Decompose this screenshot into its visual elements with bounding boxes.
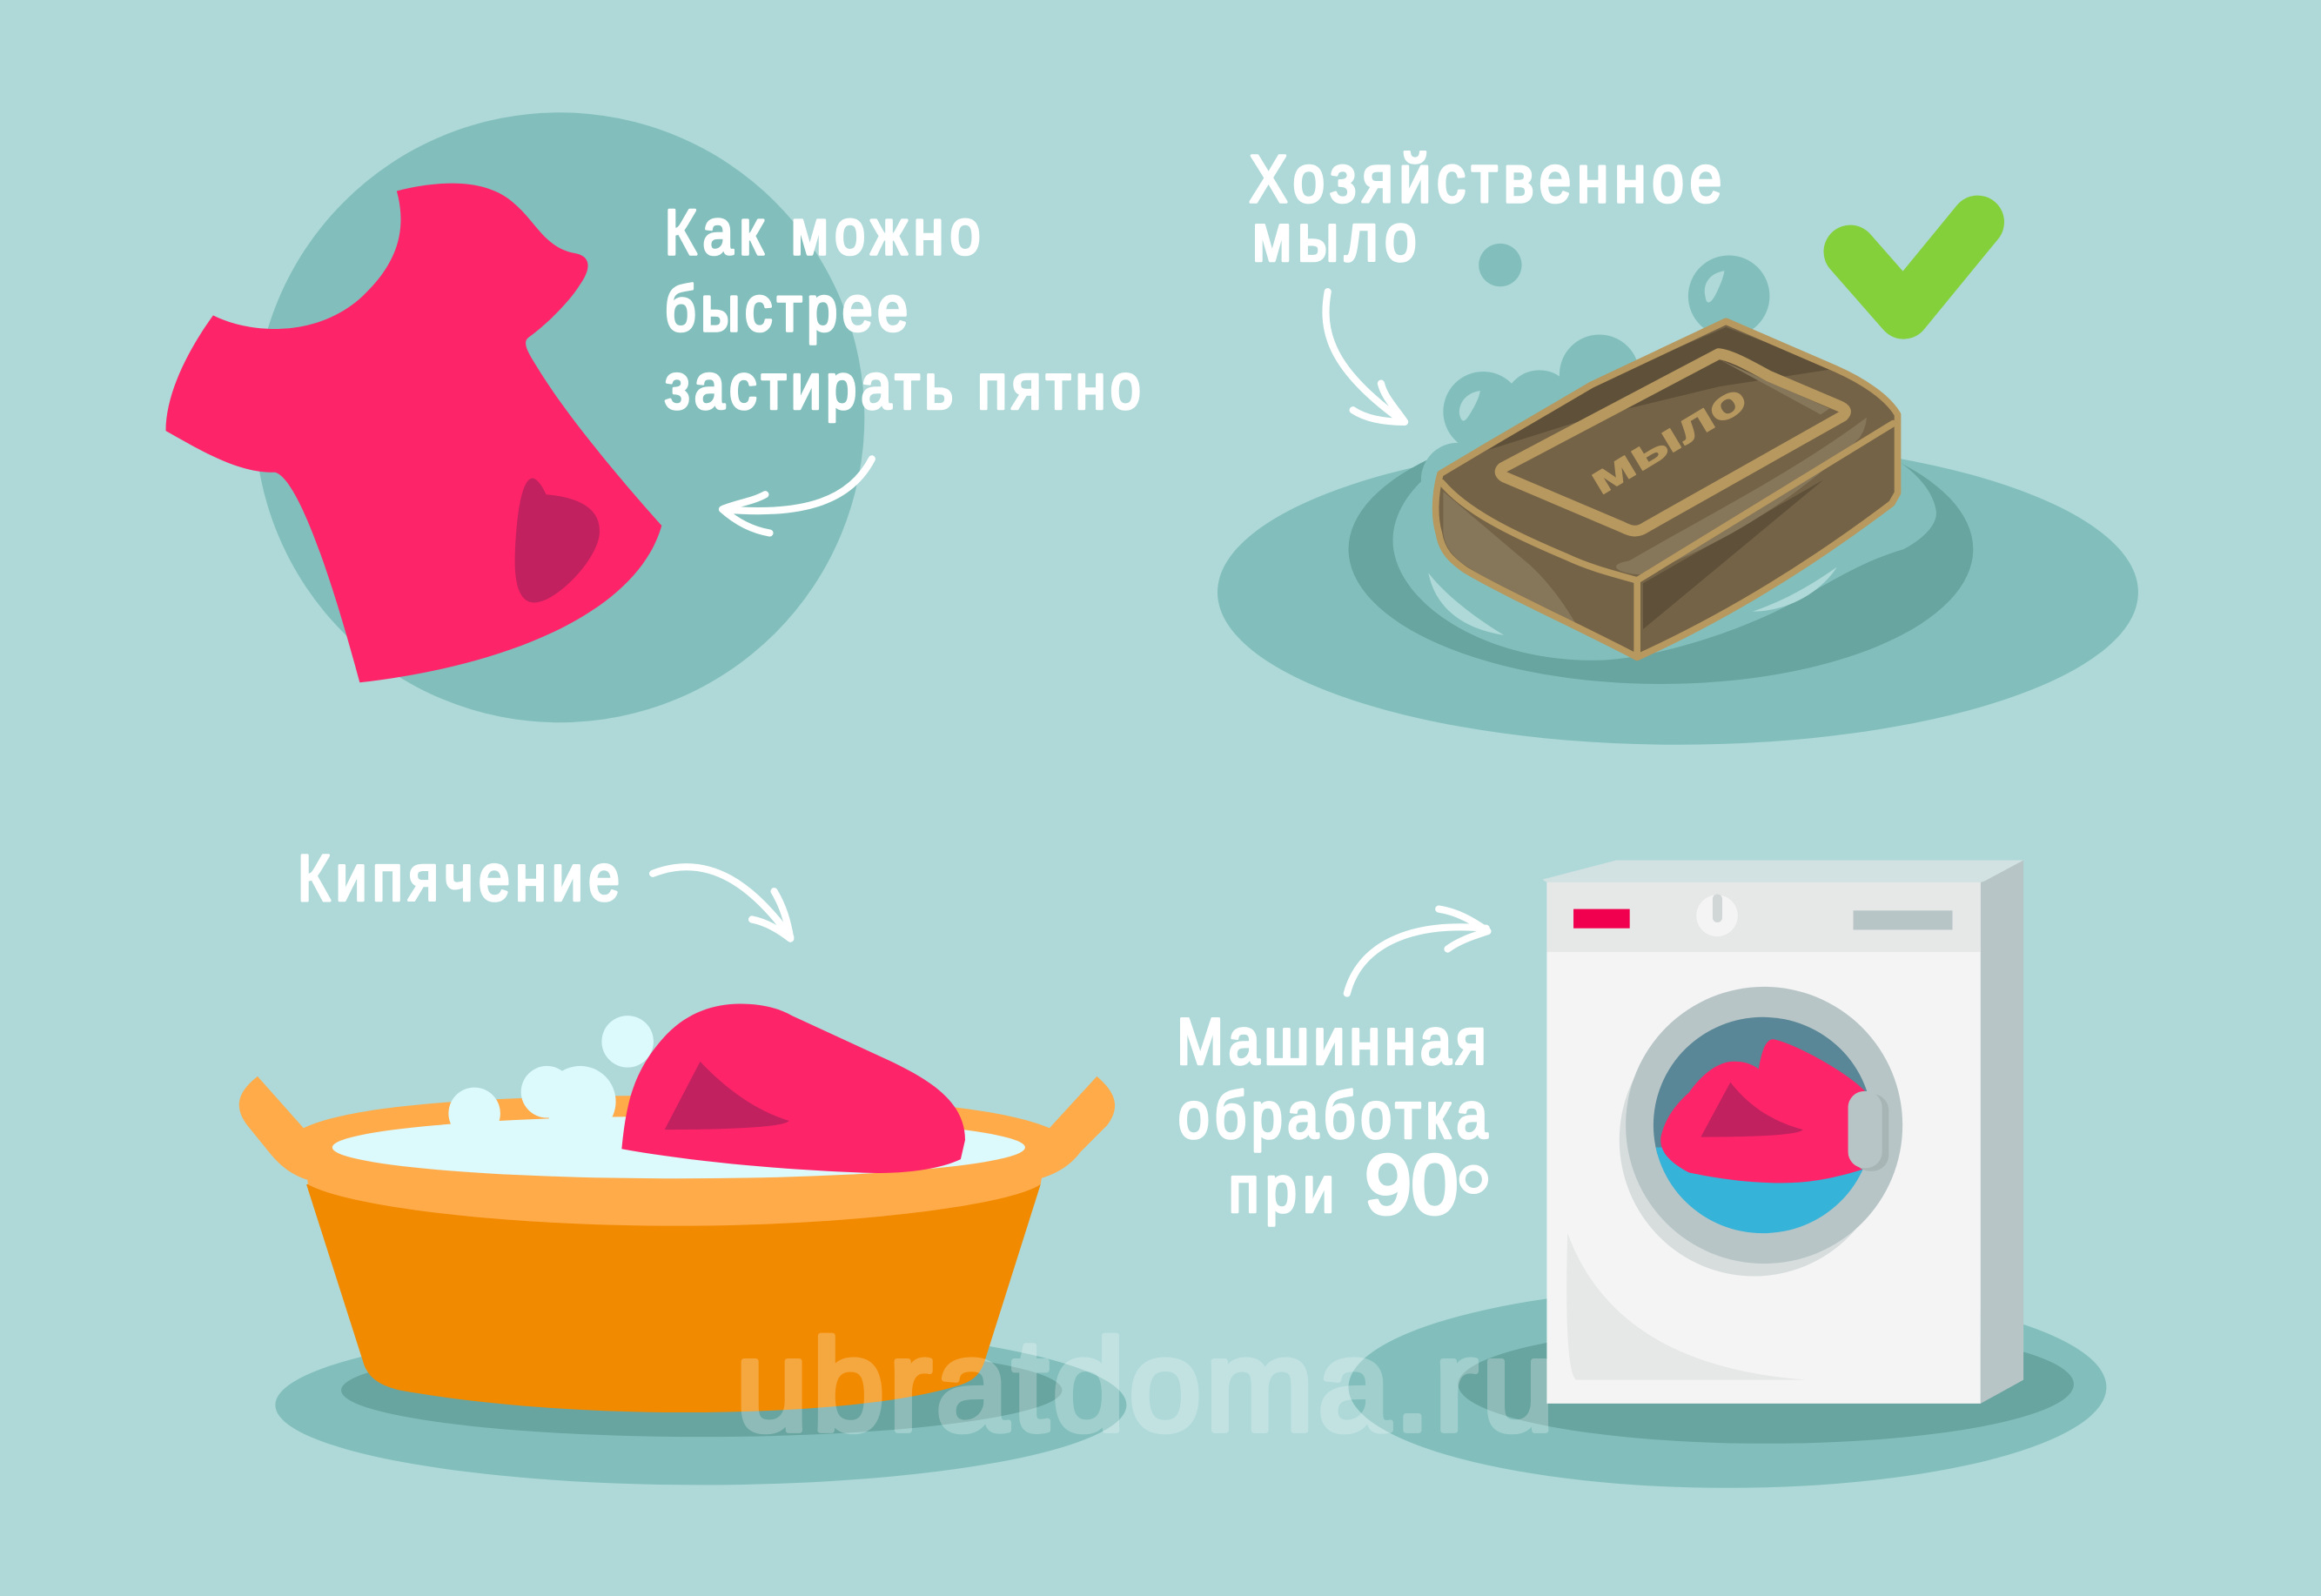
control panel: [1546, 882, 1981, 952]
red indicator: [1573, 909, 1630, 929]
watermark: ubratdoma.ru: [735, 1311, 1554, 1458]
door shadow: [1620, 1003, 1888, 1277]
water ripples: [1428, 567, 1837, 635]
text: wash as soon as possible: быстрее: [665, 274, 908, 345]
panel: washing machine: [1177, 860, 2106, 1488]
knob: [1696, 895, 1738, 936]
soap bubbles: [1421, 244, 1769, 517]
machine top: [1542, 860, 2023, 882]
soap top shadow: [1487, 327, 1835, 450]
panel: wash the stain quickly: [165, 112, 1141, 722]
door ring: [1626, 987, 1902, 1264]
soap right face shadow: [1643, 479, 1824, 629]
basin rim: [304, 1096, 1050, 1226]
drum interior: [1654, 1016, 1868, 1234]
front shadow: [1566, 1233, 1806, 1380]
icon: stain on t-shirt: [515, 479, 600, 602]
display: [1854, 910, 1952, 929]
icon: pink cloth: [621, 1003, 965, 1173]
icon: stain on cloth: [665, 1062, 789, 1130]
water puddle highlight: [1393, 459, 1936, 661]
icon: soap bar: [1436, 321, 1898, 657]
text: boiling: Кипячение: [298, 842, 620, 914]
arrow to soap: [1325, 292, 1405, 422]
text: machine wash at 90 degrees: при: [1229, 1153, 1334, 1226]
arrow to t-shirt: [722, 459, 872, 533]
text: machine wash at 90 degrees: Машинная: [1177, 1005, 1486, 1077]
soap left face highlight: [1443, 492, 1576, 625]
icon: green check mark: [1850, 222, 1977, 312]
machine shadow outer: [1349, 1286, 2106, 1488]
machine front: [1546, 882, 1981, 1404]
arrow to machine: [1347, 909, 1487, 994]
arrow to basin: [653, 867, 790, 939]
text: wash as soon as possible: Как можно: [665, 197, 980, 268]
text: machine wash at 90 degrees: 90: [1365, 1139, 1458, 1231]
text: machine wash at 90 degrees: °: [1453, 1145, 1494, 1258]
basin handles: [239, 1076, 1115, 1180]
soap top highlight band: [1616, 418, 1867, 574]
stain in drum: [1701, 1083, 1803, 1137]
text: machine wash at 90 degrees: обработка: [1178, 1079, 1488, 1152]
soap stamp highlight: [1720, 359, 1829, 414]
basin water: [332, 1117, 1025, 1178]
icon: pink t-shirt: [165, 184, 661, 682]
panel: boiling: [239, 842, 1126, 1485]
door handle: [1848, 1091, 1888, 1171]
text: laundry soap: Хозяйственное: [1250, 143, 1721, 217]
text: laundry soap: мыло: [1252, 201, 1417, 276]
panel: laundry soap: [1218, 143, 2138, 745]
soap outline: [1436, 321, 1898, 657]
text: wash as soon as possible: застирать пятно: [665, 352, 1141, 423]
text: laundry soap: [1250, 143, 1721, 276]
machine shadow inner: [1458, 1325, 2074, 1444]
water puddle outer: [1218, 439, 2138, 745]
water puddle inner: [1349, 414, 1973, 684]
basin shadow outer: [275, 1325, 1126, 1485]
soap stamp border: [1500, 354, 1845, 531]
icon: washing machine: [1542, 860, 2023, 1404]
cloth in drum: [1660, 1039, 1865, 1183]
machine side: [1981, 860, 2023, 1404]
icon: orange basin body: [306, 1184, 1041, 1412]
basin shadow inner: [341, 1344, 1062, 1437]
text: machine wash at 90 degrees: [1177, 1005, 1494, 1258]
foam bubbles: [448, 1016, 654, 1139]
background circle: [255, 112, 864, 722]
text: wash as soon as possible: [665, 197, 1141, 423]
soap stamp text: мыло: [1581, 375, 1754, 504]
